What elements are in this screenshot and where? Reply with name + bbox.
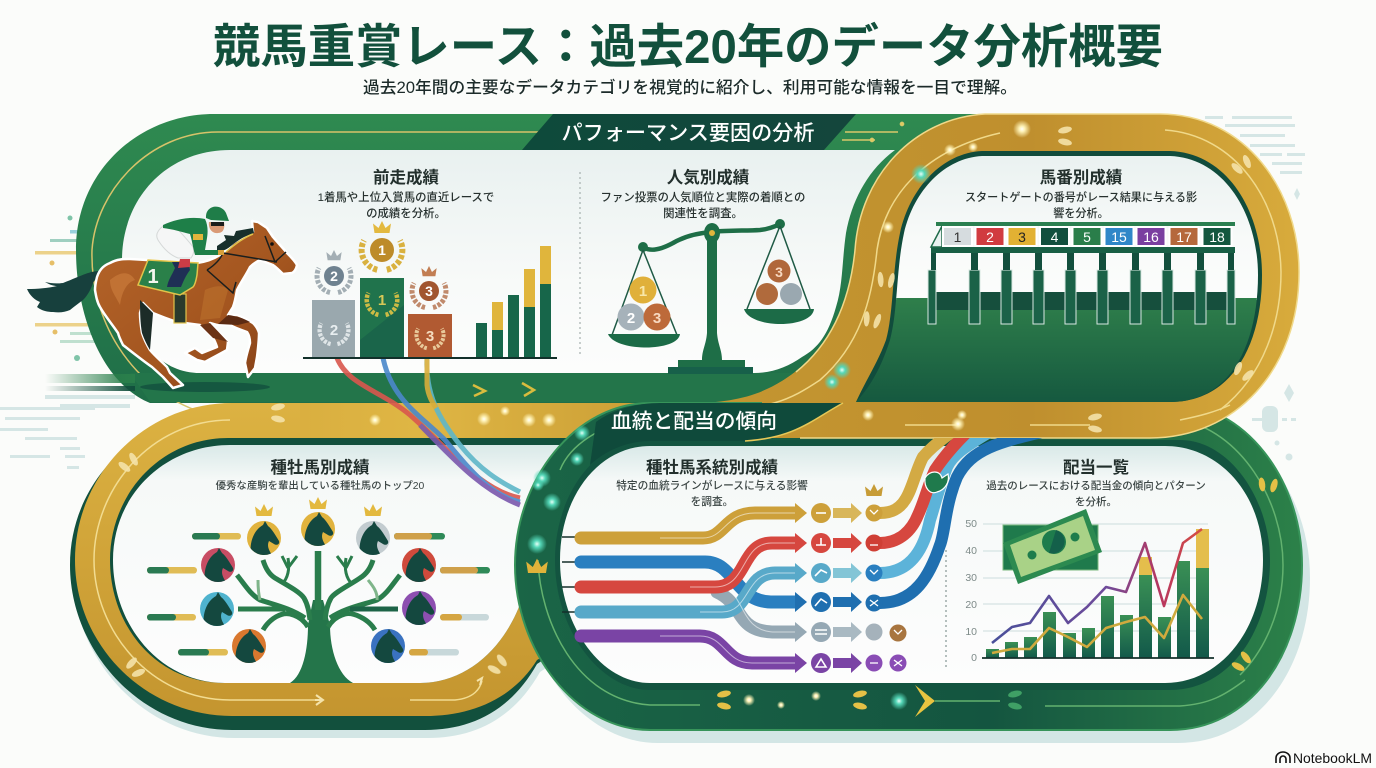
sire portrait: top centre xyxy=(301,512,335,547)
panel: popularity results xyxy=(601,167,814,374)
decorative sparkles and hoofprints on tracks xyxy=(116,120,1279,717)
heading: performance factor banner: パフォーマンス要因の分析 xyxy=(562,122,814,145)
text: popularity results: ファン投票の人気順位と実際の着順との xyxy=(601,190,805,204)
ribbons from podium xyxy=(337,358,520,505)
starting gate xyxy=(928,222,1235,324)
saddle cloth xyxy=(138,260,198,295)
track: lower-left gold track xyxy=(70,403,640,730)
heading: bloodline and payout banner xyxy=(590,403,843,465)
gate numbers: 4 xyxy=(1051,229,1059,245)
icon: racehorse and jockey: 1 xyxy=(147,266,159,288)
sire portrait: left 3 xyxy=(200,592,234,627)
coins: right pan xyxy=(756,260,802,305)
track: gold S-curve track xyxy=(300,114,1299,438)
panel: performance analysis background xyxy=(122,150,895,373)
track: gold band over green track xyxy=(762,362,1225,438)
sire portrait: left 2 xyxy=(201,548,235,583)
coins: left pan xyxy=(618,276,670,330)
chart: payouts xyxy=(965,518,1214,664)
panel: gate area xyxy=(850,150,1270,404)
text: payout list xyxy=(986,458,1206,508)
panel: sire line results xyxy=(562,425,1050,673)
text: previous race results: の成績を分析。 xyxy=(366,206,446,220)
text: gate number results: スタートゲートの番号がレース結果に与える影 xyxy=(965,190,1197,204)
text: sire line results xyxy=(616,457,808,508)
text: sire results xyxy=(216,457,425,492)
icon: banknotes xyxy=(1003,509,1102,584)
horse shading xyxy=(140,300,153,350)
sire portrait: right 4 xyxy=(371,629,405,664)
icon: balance scale xyxy=(608,219,814,374)
gate numbers xyxy=(942,226,1232,247)
panel: sire results background xyxy=(110,438,610,683)
mane xyxy=(217,228,254,251)
sire portrait: left 4 xyxy=(232,629,266,664)
panel: bloodline and payout background xyxy=(560,446,1263,683)
text: gate number results xyxy=(965,167,1197,220)
podium chart: 3 xyxy=(426,328,434,345)
axis labels: 20 xyxy=(965,599,977,611)
text: popularity results xyxy=(601,167,805,220)
axis labels: 50 xyxy=(965,518,977,530)
medal 1 xyxy=(362,221,402,270)
podium chart: 1 xyxy=(378,292,386,309)
text: sire line results: 特定の血統ラインがレースに与える影響 xyxy=(616,479,808,492)
text: sire line results: 種牡馬系統別成績 xyxy=(646,457,778,477)
subtitle: 過去20年間の主要なデータカテゴリを視覚的に紹介し、利用可能な情報を一目で理解。 xyxy=(363,77,1017,97)
gate numbers: 18 xyxy=(1209,229,1225,245)
gate numbers: 15 xyxy=(1111,229,1127,245)
text: popularity results: 関連性を調査。 xyxy=(663,206,743,220)
text: sire line results: を調査。 xyxy=(691,495,733,508)
icon: green crest on ribbons xyxy=(925,472,948,493)
gate numbers: 1 xyxy=(954,229,962,245)
horse body xyxy=(95,221,297,388)
girth xyxy=(174,294,186,323)
coins: left pan: 1 xyxy=(639,283,647,300)
coins: right pan: 3 xyxy=(775,264,783,280)
panel: previous race results xyxy=(303,167,557,358)
sire portrait: right 3 xyxy=(402,591,436,626)
divider xyxy=(579,172,581,357)
panel: gate number results xyxy=(928,167,1235,324)
logo: NotebookLM: NotebookLM xyxy=(1293,750,1372,766)
coins: left pan: 2 xyxy=(627,310,635,327)
tail xyxy=(27,271,100,312)
gate numbers: 16 xyxy=(1143,229,1159,245)
bar chart: performance xyxy=(476,246,551,357)
coins: left pan: 3 xyxy=(653,310,661,327)
text: gate number results: 馬番別成績 xyxy=(1040,167,1123,187)
text: previous race results: 前走成績 xyxy=(373,167,440,187)
banner trailing lines xyxy=(842,122,904,142)
panel: payout list xyxy=(965,458,1214,664)
medal 3 xyxy=(412,266,446,308)
bloodline flow chart xyxy=(581,513,795,663)
sire portrait: top left xyxy=(247,521,281,556)
rating bars xyxy=(147,533,490,656)
heading: bloodline and payout banner: 血統と配当の傾向 xyxy=(611,410,777,433)
speed lines and pale decorations xyxy=(0,116,1305,469)
text: sire results: 種牡馬別成績 xyxy=(270,457,370,477)
text: previous race results: 1着馬や上位入賞馬の直近レースで xyxy=(318,190,494,204)
track: lower-right green track xyxy=(515,403,1302,730)
jockey boot xyxy=(167,262,190,287)
divider xyxy=(945,550,947,668)
axis labels: 0 xyxy=(971,652,977,664)
text: payout list: を分析。 xyxy=(1075,495,1117,508)
ribbons rising to the top band xyxy=(880,425,1050,603)
tree chart xyxy=(237,551,400,683)
medal 2 xyxy=(317,250,351,292)
text: previous race results xyxy=(318,167,494,220)
medal 3: 3 xyxy=(425,283,433,299)
gate numbers: 5 xyxy=(1083,229,1091,245)
jockey legs xyxy=(157,226,194,258)
crowns xyxy=(255,497,382,516)
axis labels xyxy=(965,518,977,664)
shadow: lower tracks xyxy=(73,416,1310,743)
gold track details xyxy=(700,114,1299,438)
panel track: green top track xyxy=(45,114,1020,410)
gate numbers: 3 xyxy=(1018,229,1026,245)
text: payout list: 過去のレースにおける配当金の傾向とパターン xyxy=(986,479,1206,492)
flow nodes xyxy=(811,484,906,673)
jockey head xyxy=(209,222,224,233)
podium chart: 2 xyxy=(330,322,338,339)
flow arrowheads xyxy=(795,503,807,673)
bridle and reins xyxy=(207,236,286,293)
text: payout list: 配当一覧 xyxy=(1063,458,1129,477)
axis labels: 30 xyxy=(965,572,977,584)
heading: performance factor banner xyxy=(522,114,856,150)
title: 競馬重賞レース：過去20年のデータ分析概要 xyxy=(213,20,1163,73)
panel: sire results xyxy=(147,457,490,683)
gate numbers: 17 xyxy=(1176,229,1192,245)
chart grid xyxy=(983,524,1208,631)
icon: racehorse and jockey xyxy=(27,207,297,392)
line: upper xyxy=(992,529,1202,643)
bars xyxy=(986,561,1209,658)
line: lower xyxy=(992,595,1202,653)
connector ticks xyxy=(562,537,580,612)
medal 1: 1 xyxy=(378,242,386,258)
sire portrait: top right xyxy=(356,521,390,556)
text: sire results: 優秀な産駒を輩出している種牡馬のトップ20 xyxy=(216,479,425,492)
podium chart xyxy=(303,221,557,358)
text: gate number results: 響を分析。 xyxy=(1053,206,1109,220)
gate numbers: 2 xyxy=(986,229,994,245)
axis labels: 10 xyxy=(965,626,977,638)
medal 2: 2 xyxy=(330,268,338,284)
axis labels: 40 xyxy=(965,545,977,557)
text: popularity results: 人気別成績 xyxy=(667,167,750,187)
sire portrait: right 2 xyxy=(402,548,436,583)
jockey torso xyxy=(163,218,224,255)
